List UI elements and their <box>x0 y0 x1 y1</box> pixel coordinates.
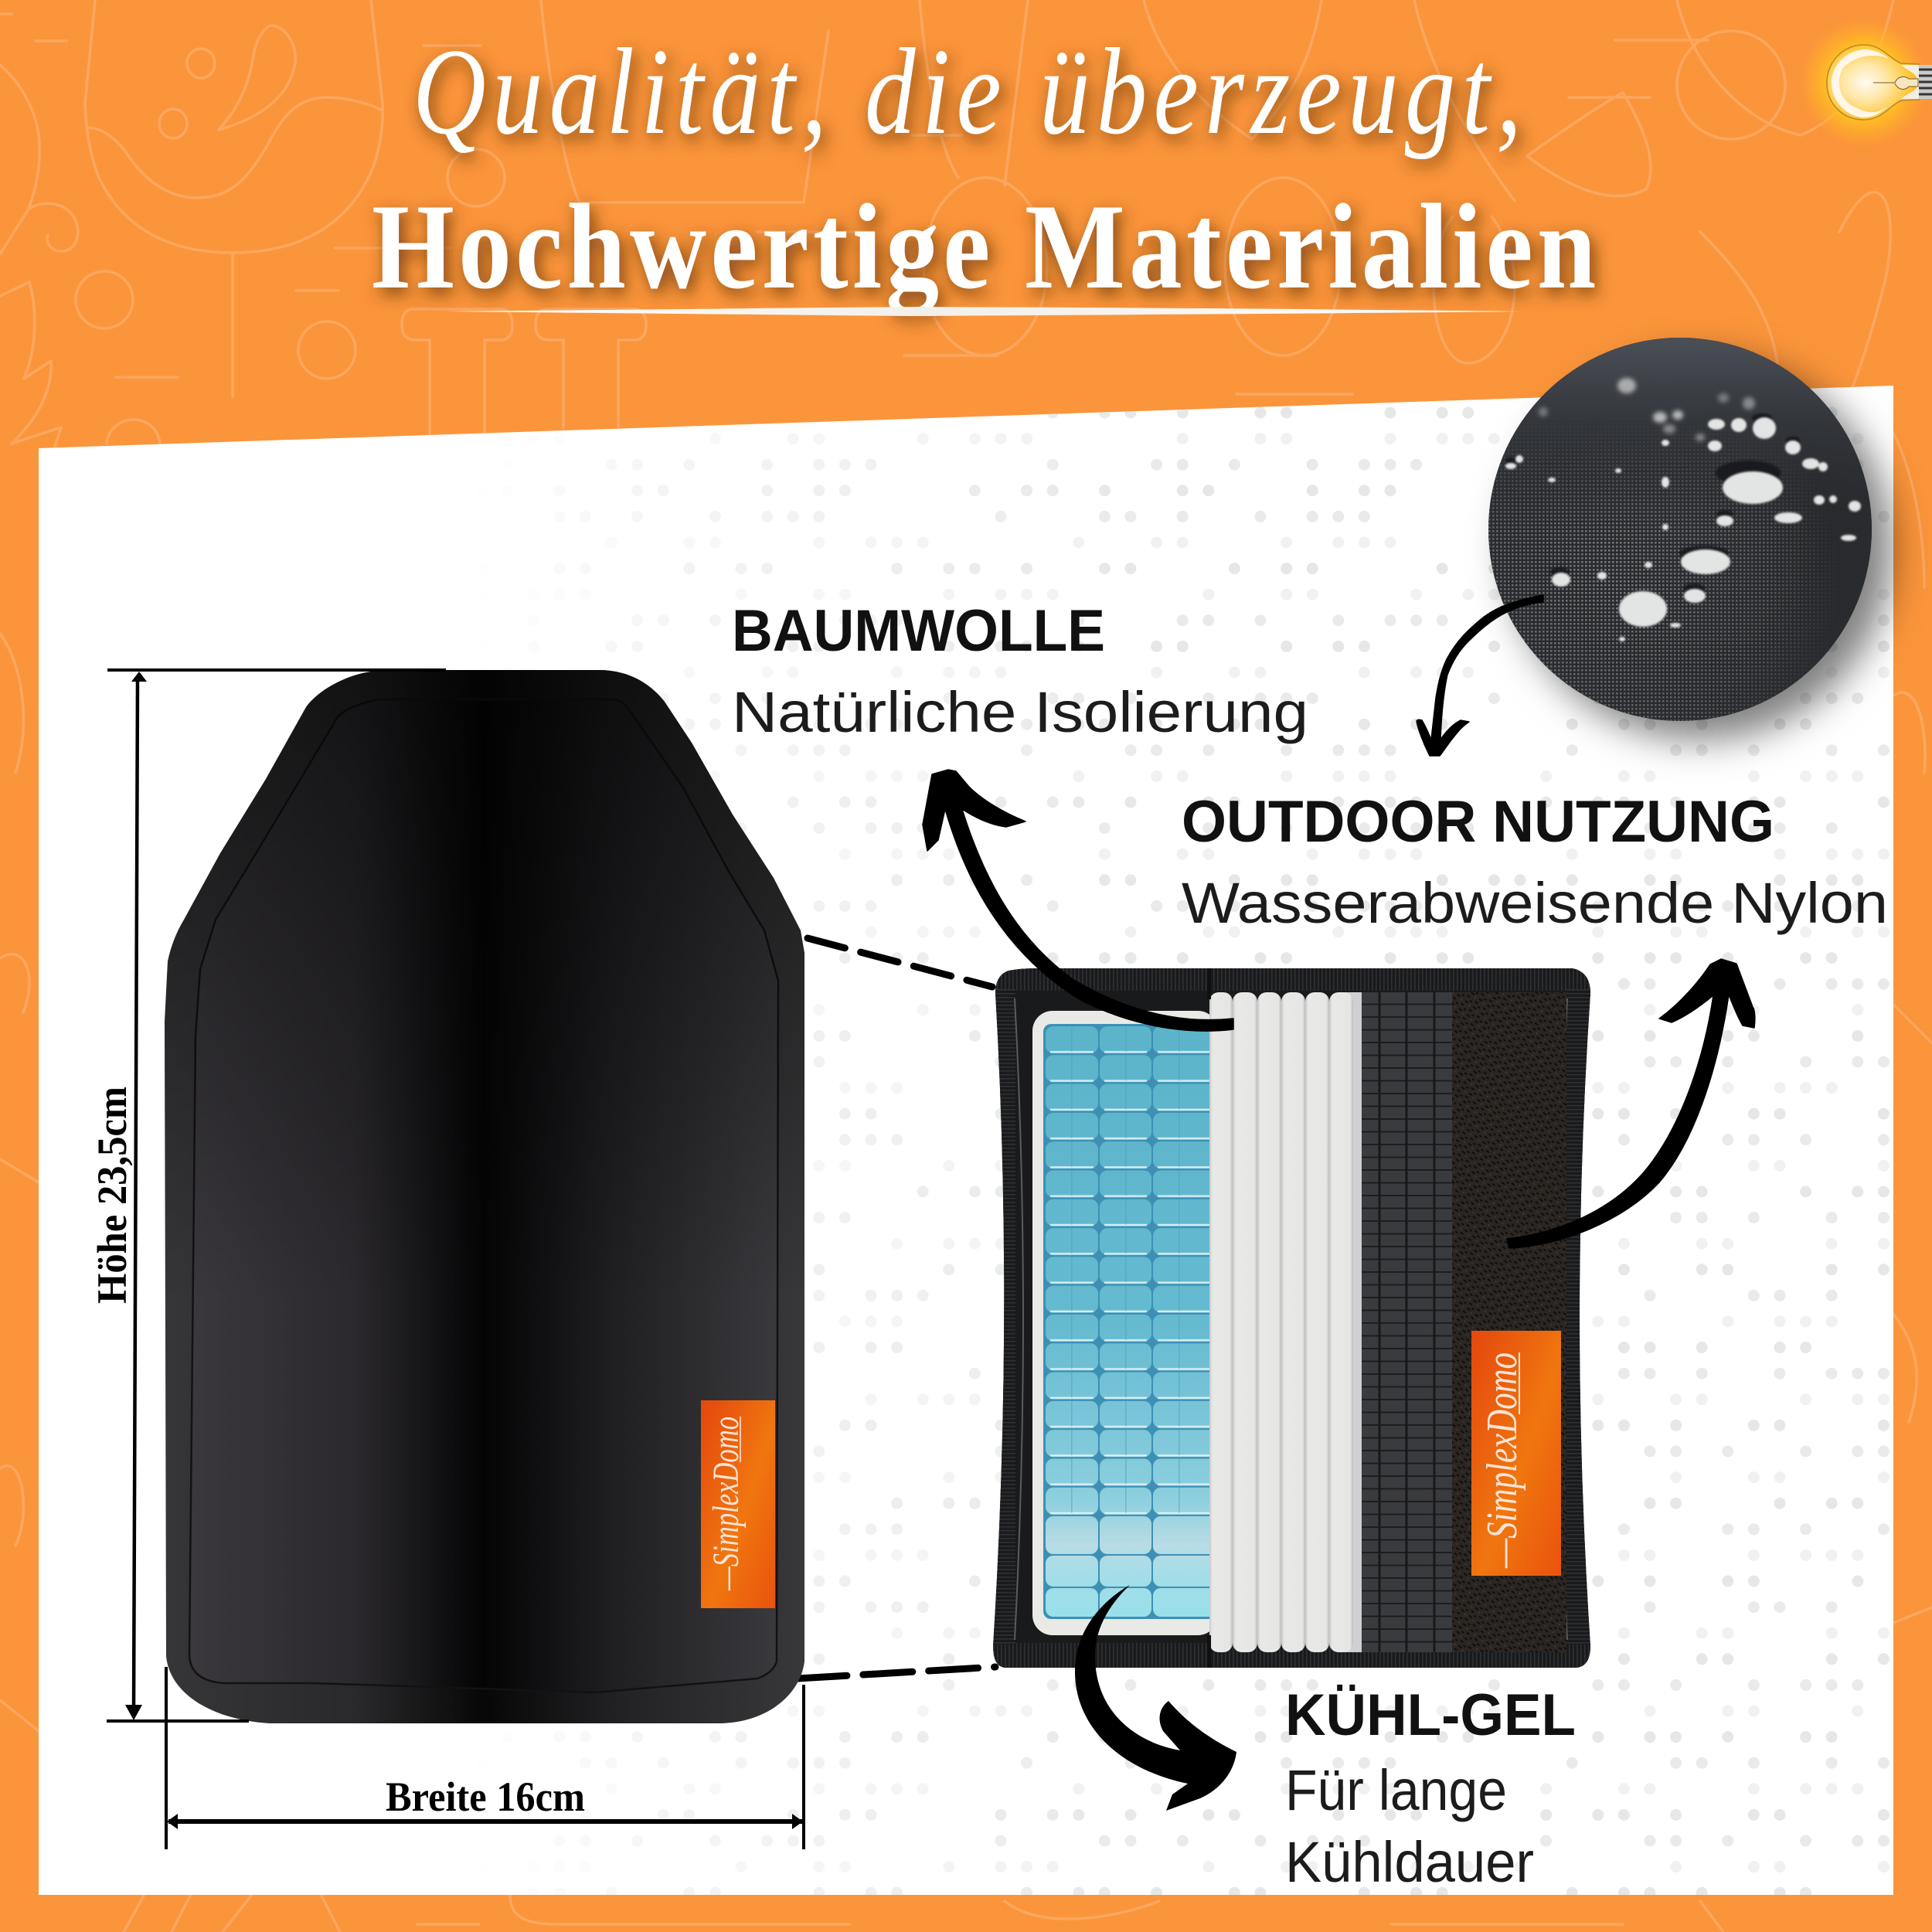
arrow: nylon layer to Outdoor label <box>1507 959 1755 1248</box>
dimension: width <box>166 1667 804 1849</box>
layer: cooling gel <box>1032 1011 1218 1635</box>
dimension: width: Breite 16cm <box>386 1774 585 1820</box>
heading: Baumwolle <box>732 598 1308 744</box>
heading: Outdoor Nutzung: Wasserabweisende Nylon <box>1182 871 1888 935</box>
heading: Kühl-Gel: Kühldauer <box>1285 1830 1534 1894</box>
title: Hochwertige Materialien <box>372 179 1596 315</box>
layer: nylon shell <box>1452 992 1566 1652</box>
title underline <box>444 307 1522 316</box>
title: Qualität, die überzeugt, <box>413 23 1522 160</box>
arrow: cotton layer to Baumwolle label <box>923 770 1233 1031</box>
sleeve brand tag: —SimplexDomo <box>706 1417 747 1591</box>
mat brand tag: —SimplexDomo <box>1478 1352 1526 1569</box>
icon: light bulb <box>1799 18 1932 148</box>
mat brand tag <box>1471 1331 1561 1576</box>
heading: Baumwolle: Natürliche Isolierung <box>732 680 1308 744</box>
dotted texture <box>606 406 1889 1895</box>
title <box>372 23 1596 315</box>
heading: Kühl-Gel: Für lange <box>1285 1758 1507 1822</box>
water-repellent fabric photo <box>1488 338 1872 721</box>
arrow: gel layer to Kühl-Gel label <box>1075 1585 1236 1811</box>
product: open layered mat <box>989 966 1592 1669</box>
layer: quilted insulation <box>1362 992 1452 1652</box>
sleeve brand tag <box>701 1400 775 1608</box>
heading: Kühl-Gel <box>1285 1682 1576 1894</box>
dashed connector top <box>808 938 992 987</box>
dimension: height: Höhe 23,5cm <box>89 1087 135 1304</box>
arrow: fabric photo to outdoor label <box>1417 595 1543 756</box>
dashed connector bottom <box>798 1667 995 1679</box>
heading: Baumwolle: BAUMWOLLE <box>732 598 1105 664</box>
product: wine cooler sleeve <box>165 670 804 1723</box>
heading: Kühl-Gel: KÜHL-GEL <box>1285 1682 1576 1748</box>
panel: white sheet <box>39 386 1893 1895</box>
layer: cotton ribs <box>1209 992 1363 1652</box>
heading: Outdoor Nutzung: OUTDOOR NUTZUNG <box>1182 789 1774 855</box>
heading: Outdoor Nutzung <box>1182 789 1888 935</box>
dimension: height <box>89 670 446 1721</box>
